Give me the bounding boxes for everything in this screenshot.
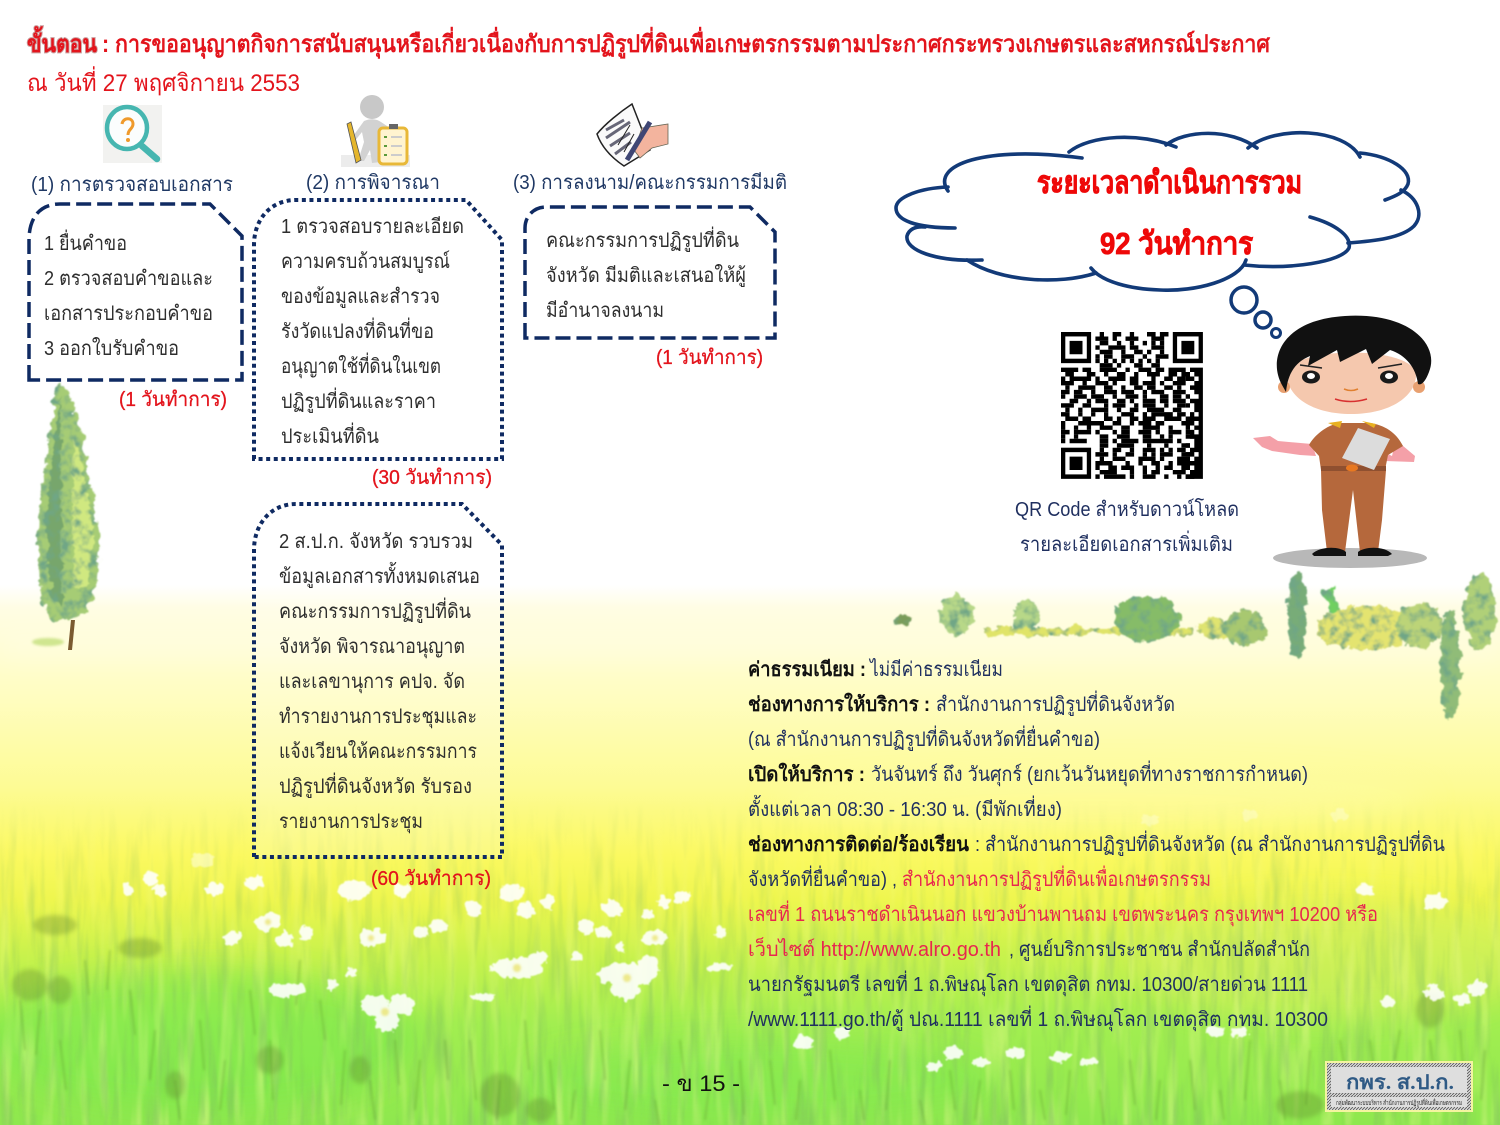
contact channels: เว็บไซต์ http://www.alro.go.th: [748, 936, 1001, 961]
character: officer: [1253, 316, 1431, 568]
step 2 heading: (2) การพิจารณา: [306, 172, 440, 194]
title: ขั้นตอน: [27, 25, 98, 58]
panel: step 2 box part 1: ประเมินที่ดิน: [281, 422, 379, 448]
QR caption: [1015, 498, 1239, 556]
panel: step 2 box part 1: อนุญาตใช้ที่ดินในเขต: [281, 352, 441, 379]
head: [1287, 352, 1416, 414]
panel: step 2 box part 2: ทำรายงานการประชุมและ: [279, 706, 477, 729]
background: meadow: [0, 570, 1500, 1125]
grass blades: [20, 950, 1485, 1125]
clipboard: [1342, 428, 1390, 470]
belt: [1321, 466, 1386, 471]
icon: hand signing document: [597, 104, 668, 166]
panel: step 3 box: มีอำนาจลงนาม: [546, 300, 664, 322]
panel: step 2 box part 1: 1 ตรวจสอบรายละเอียด: [281, 216, 464, 238]
panel: step 2 box part 1: ปฏิรูปที่ดินและราคา: [281, 387, 436, 414]
panel: step 2 box part 2: คณะกรรมการปฏิรูปที่ดิน: [279, 597, 471, 624]
opening hours: [748, 760, 1308, 821]
title: : การขออนุญาตกิจการสนับสนุนหรือเกี่ยวเนื่องกับการปฏิรูปที่ดินเพื่อเกษตรกรรมตามประกาศกระทรวงเกษตรและสหกรณ์ประกาศ: [102, 26, 1271, 60]
panel: step 3 box: จังหวัด มีมติและเสนอให้ผู้: [546, 264, 746, 288]
service channel: (ณ สำนักงานการปฏิรูปที่ดินจังหวัดที่ยื่นคำขอ): [748, 725, 1100, 752]
panel: step 2 box part 2: ปฏิรูปที่ดินจังหวัด รับรอง: [279, 772, 472, 799]
legs: [1321, 470, 1386, 552]
panel: step 2 box part 1: รังวัดแปลงที่ดินที่ขอ: [281, 317, 434, 343]
QR code: [1061, 334, 1203, 477]
torso: [1309, 423, 1403, 470]
grass texture: [0, 800, 1500, 1125]
thought cloud: 92 วันทำการ: [1100, 226, 1253, 261]
title: [27, 25, 1271, 97]
title: ณ วันที่ 27 พฤศจิกายน 2553: [27, 66, 300, 97]
icon: magnifier: [103, 105, 162, 163]
shoes: [1312, 548, 1392, 556]
duration: step 1: (1 วันทำการ): [119, 389, 227, 411]
pointing arm: [1253, 436, 1316, 456]
thought cloud: ระยะเวลาดำเนินการรวม: [1037, 165, 1302, 200]
flowers: [121, 809, 1488, 1072]
contact channels: จังหวัดที่ยื่นคำขอ) ,: [748, 865, 897, 891]
panel: step 2 box part 2: รายงานการประชุม: [279, 811, 423, 834]
epaulettes: [1328, 421, 1376, 428]
panel: step 1 box: 3 ออกใบรับคำขอ: [44, 337, 179, 360]
step 1 heading: (1) การตรวจสอบเอกสาร: [31, 174, 233, 196]
service channel: [748, 690, 1175, 752]
panel: step 1 box: [29, 204, 242, 380]
panel: step 2 box part 2: 2 ส.ป.ก. จังหวัด รวบรวม: [279, 531, 473, 553]
tree: left cypress: [32, 385, 99, 650]
contact channels: : สำนักงานการปฏิรูปที่ดินจังหวัด (ณ สำนักงานการปฏิรูปที่ดิน: [975, 830, 1445, 857]
panel: step 2 box part 1: [254, 200, 502, 459]
QR caption: รายละเอียดเอกสารเพิ่มเติม: [1020, 530, 1233, 556]
dark grass clumps: [12, 915, 1444, 1122]
opening hours: ตั้งแต่เวลา 08:30 - 16:30 น. (มีพักเที่ยง): [748, 795, 1062, 821]
service channel: ช่องทางการให้บริการ :: [748, 692, 930, 716]
icon: person with clipboard: [341, 95, 410, 167]
contact channels: , ศูนย์บริการประชาชน สำนักปลัดสำนัก: [1009, 938, 1310, 962]
panel: step 1 box: 1 ยื่นคำขอ: [44, 229, 127, 255]
fee line: ไม่มีค่าธรรมเนียม: [868, 658, 1003, 681]
duration: step 2 part 2: (60 วันทำการ): [371, 868, 491, 890]
panel: step 2 box part 2: แจ้งเวียนให้คณะกรรมการ: [279, 740, 477, 763]
step 3 heading: (3) การลงนาม/คณะกรรมการมีมติ: [513, 172, 787, 194]
panel: step 2 box part 1: ของข้อมูลและสำรวจ: [281, 286, 440, 309]
hair: [1277, 316, 1431, 392]
opening hours: เปิดให้บริการ :: [748, 762, 865, 786]
opening hours: วันจันทร์ ถึง วันศุกร์ (ยกเว้นวันหยุดที่ทางราชการกำหนด): [871, 760, 1308, 787]
QR caption: QR Code สำหรับดาวน์โหลด: [1015, 498, 1239, 521]
panel: step 2 box part 2: [254, 504, 502, 857]
contact channels: เลขที่ 1 ถนนราชดำเนินนอก แขวงบ้านพานถม เขตพระนคร กรุงเทพฯ 10200 หรือ: [748, 900, 1378, 927]
contact channels: สำนักงานการปฏิรูปที่ดินเพื่อเกษตรกรรม: [902, 865, 1211, 892]
logo: organisation stamp: กพร. ส.ป.ก.: [1346, 1072, 1454, 1094]
distant trees: [895, 571, 1496, 719]
panel: step 2 box part 2: ข้อมูลเอกสารทั้งหมดเสนอ: [279, 562, 480, 589]
service channel: สำนักงานการปฏิรูปที่ดินจังหวัด: [936, 690, 1175, 717]
contact channels: นายกรัฐมนตรี เลขที่ 1 ถ.พิษณุโลก เขตดุสิต กทม. 10300/สายด่วน 1111: [748, 970, 1308, 997]
duration: step 2 part 1: (30 วันทำการ): [372, 467, 492, 489]
logo: organisation stamp: [1325, 1061, 1473, 1112]
ground shadow: [1273, 548, 1427, 568]
fee line: [748, 658, 1003, 681]
info block: [748, 658, 1445, 1032]
panel: step 1 box: 2 ตรวจสอบคำขอและ: [44, 268, 213, 290]
thought cloud: [896, 133, 1419, 338]
duration: step 3: (1 วันทำการ): [656, 347, 763, 369]
eyes: [1302, 370, 1320, 384]
contact channels: ช่องทางการติดต่อ/ร้องเรียน: [748, 833, 969, 856]
contact channels: /www.1111.go.th/ตู้ ปณ.1111 เลขที่ 1 ถ.พิษณุโลก เขตดุสิต กทม. 10300: [748, 1005, 1328, 1032]
other arm: [1364, 440, 1415, 462]
page number: - ข 15 -: [662, 1071, 740, 1096]
flower centres: [265, 919, 658, 1016]
panel: step 3 box: คณะกรรมการปฏิรูปที่ดิน: [546, 226, 739, 253]
fee line: ค่าธรรมเนียม :: [748, 658, 866, 681]
panel: step 2 box part 1: ความครบถ้วนสมบูรณ์: [281, 250, 450, 274]
panel: step 1 box: เอกสารประกอบคำขอ: [44, 303, 213, 325]
panel: step 2 box part 2: และเลขานุการ คปจ. จัด: [279, 671, 465, 694]
brows and mouth: [1300, 364, 1402, 368]
contact channels: [748, 830, 1445, 1032]
panel: step 2 box part 2: จังหวัด พิจารณาอนุญาต: [279, 636, 465, 659]
panel: step 3 box: [525, 207, 775, 338]
